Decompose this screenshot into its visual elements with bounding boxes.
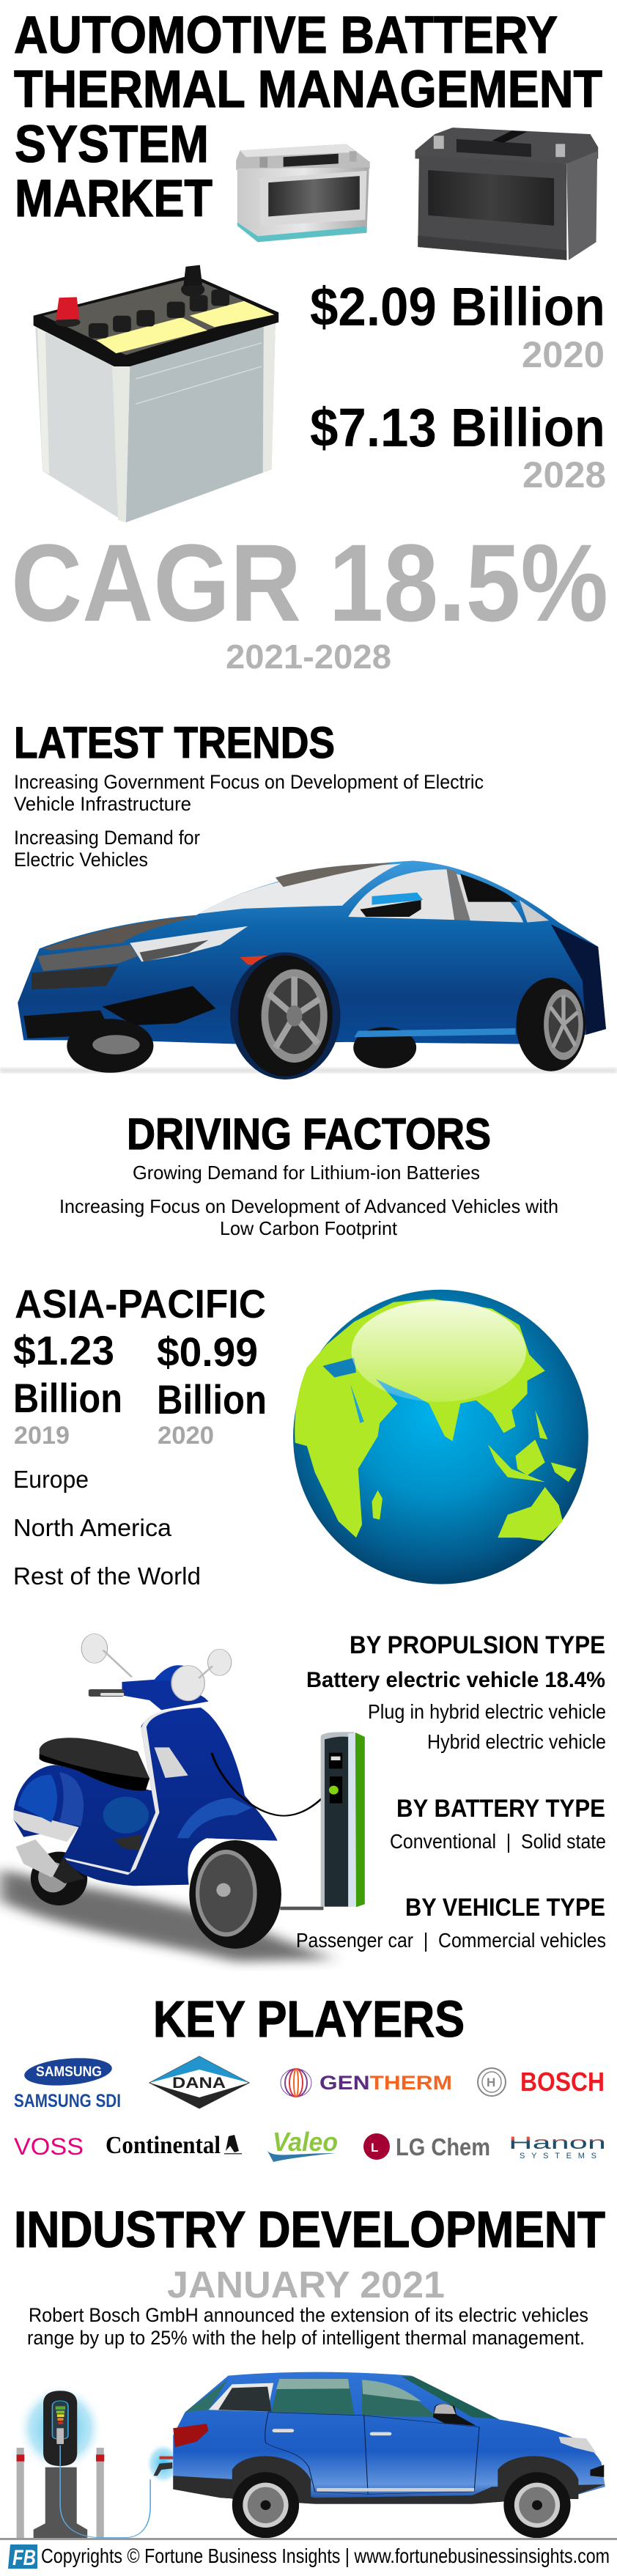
title: AUTOMOTIVE BATTERY (14, 7, 558, 64)
ground line (0, 2538, 617, 2540)
text: other regions: North America (13, 1514, 172, 1541)
text: other regions: Europe (13, 1466, 89, 1493)
icon: silver battery (236, 144, 370, 242)
icon: dark battery (415, 128, 598, 260)
stat: 2020 value: $0.99 (157, 1329, 258, 1375)
text: driving factors list: Increasing Focus on Development of Advanced Vehicles with (59, 1195, 558, 1217)
market size 2028: 2028 (522, 454, 606, 495)
logo: Bosch: BOSCH (520, 2067, 605, 2097)
title (14, 7, 602, 228)
illustration: electric scooter and charger (0, 1634, 365, 1962)
icon: large battery (34, 265, 278, 523)
stat: 2019 value: $1.23 (13, 1327, 114, 1373)
logo: Gentherm: GEN THERM (319, 2072, 452, 2094)
illustration: blue SUV (173, 2372, 605, 2538)
logo: Bosch: H (487, 2075, 495, 2089)
text: driving factors list (59, 1162, 558, 1239)
date: January 2021: JANUARY 2021 (167, 2264, 445, 2306)
stat: 2020 value: Billion (157, 1376, 267, 1422)
footer (8, 2544, 610, 2570)
stat: 2019 value: 2019 (14, 1422, 70, 1450)
market size 2020: $2.09 Billion (310, 276, 605, 337)
logo: Samsung SDI: SAMSUNG (36, 2064, 102, 2080)
text: Bosch announcement (27, 2304, 588, 2349)
text: other regions (13, 1466, 201, 1590)
logo: Gentherm (281, 2069, 452, 2097)
icon: Fortune Business Insights logo: FB (12, 2546, 36, 2570)
segmentation: vehicle type (296, 1894, 606, 1952)
illustration: blue sedan (0, 860, 617, 1080)
market size 2028 (310, 397, 606, 495)
segmentation: propulsion type: Battery electric vehicle 18.4% (306, 1668, 605, 1692)
stat: 2019 value: Billion (13, 1375, 122, 1421)
logo: Voss: VOSS (14, 2133, 84, 2160)
logo: LG Chem (363, 2133, 490, 2160)
text: Bosch announcement: range by up to 25% with the help of intelligent thermal management. (27, 2327, 585, 2349)
text: trends list: Vehicle Infrastructure (14, 793, 191, 815)
text: driving factors list: Low Carbon Footprint (220, 1217, 398, 1239)
logo: Hanon Systems: Hanon (509, 2133, 606, 2153)
logo: Hanon Systems: SYSTEMS (520, 2152, 596, 2160)
text: Bosch announcement: Robert Bosch GmbH announced the extension of its electric vehicles (29, 2304, 588, 2326)
text: trends list: Electric Vehicles (14, 849, 148, 871)
logo: Dana (149, 2056, 249, 2108)
logo: Valeo: Valeo (273, 2127, 338, 2157)
logo: LG Chem: LG Chem (396, 2133, 490, 2160)
heading: asia-pacific: ASIA-PACIFIC (15, 1281, 266, 1326)
heading: latest trends: LATEST TRENDS (14, 718, 335, 767)
text: driving factors list: Growing Demand for Lithium-ion Batteries (133, 1162, 480, 1184)
title: SYSTEM (15, 116, 209, 174)
logo: Continental: Continental (106, 2132, 221, 2159)
text: trends list (14, 771, 484, 871)
logo: Bosch (478, 2067, 605, 2097)
logo: Samsung SDI: SAMSUNG SDI (14, 2091, 121, 2111)
logo: LG Chem: L (371, 2141, 378, 2155)
stat: 2020 value: 2020 (158, 1422, 214, 1450)
icon: globe (293, 1290, 588, 1584)
title: MARKET (15, 170, 213, 228)
text: trends list: Increasing Demand for (14, 827, 200, 849)
market size 2028: $7.13 Billion (310, 397, 605, 458)
market size 2020 (310, 276, 605, 375)
logo: Hanon Systems (509, 2133, 606, 2160)
stat: 2019 value (13, 1327, 122, 1450)
market size 2020: 2020 (522, 334, 605, 375)
logo: Dana: DANA (172, 2075, 226, 2092)
text: other regions: Rest of the World (13, 1562, 201, 1590)
CAGR callout: 2021-2028 (226, 638, 391, 676)
segmentation: battery type (390, 1795, 606, 1853)
heading: driving factors: DRIVING FACTORS (127, 1110, 491, 1159)
illustration: charging station (17, 2384, 181, 2539)
heading: key players: KEY PLAYERS (153, 1990, 465, 2048)
text: trends list: Increasing Government Focus on Development of Electric (14, 771, 484, 793)
logo: Samsung SDI (14, 2055, 121, 2111)
stat: 2020 value (157, 1329, 267, 1450)
segmentation: propulsion type (306, 1631, 606, 1753)
